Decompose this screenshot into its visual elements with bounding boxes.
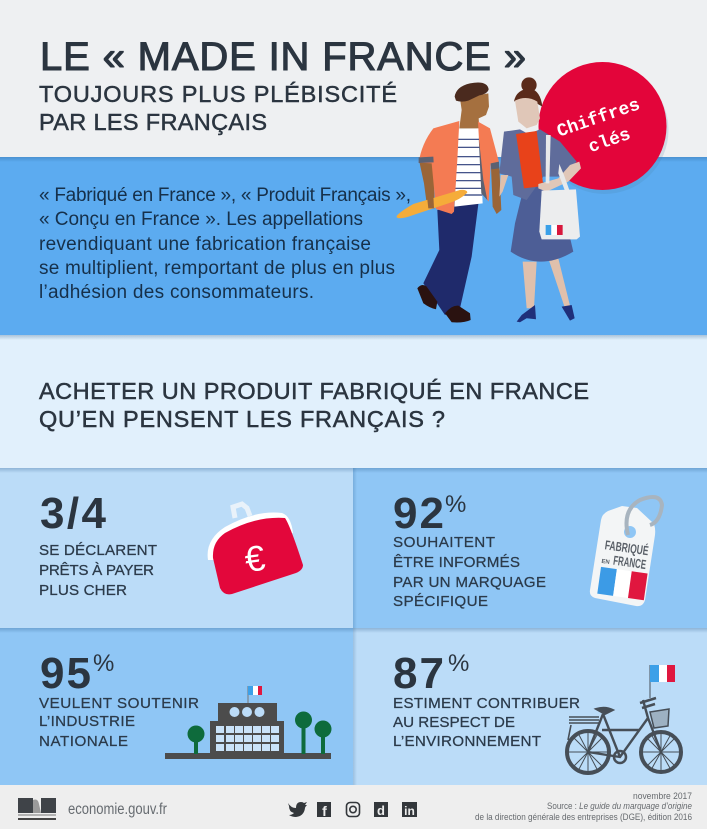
intro text block: revendiquant une fabrication française	[39, 234, 371, 255]
stat: 95%: L’INDUSTRIE	[39, 713, 135, 730]
stat: 87%	[393, 649, 580, 750]
intro text block: « Fabriqué en France », « Produit Français »,	[39, 185, 411, 206]
heading: question: ACHETER UN PRODUIT FABRIQUÉ EN FRANCE	[39, 378, 589, 404]
icon: bicycle with flag	[567, 665, 682, 773]
badge: Chiffres clés: Chiffres	[555, 95, 643, 142]
icon: twitter	[288, 802, 307, 817]
stat: 92%: SPÉCIFIQUE	[393, 593, 488, 610]
stat: 92%: ÊTRE INFORMÉS	[393, 554, 520, 571]
panel: question band	[0, 335, 707, 468]
stat: 92%: %	[445, 491, 466, 518]
stat: 92%: SOUHAITENT	[393, 534, 495, 551]
stat: 87%: %	[448, 650, 469, 677]
website url: economie.gouv.fr	[68, 801, 167, 818]
stat: 95%	[39, 649, 199, 750]
heading: question	[39, 378, 589, 432]
panel: stat 3/4 background	[0, 468, 353, 628]
icon: Fabriqué en France tag: EN	[601, 559, 610, 566]
stat: 92%: PAR UN MARQUAGE	[393, 574, 546, 591]
subtitle: TOUJOURS PLUS PLÉBISCITÉ	[39, 81, 397, 107]
logo: République française	[18, 798, 56, 819]
stat: 3/4: SE DÉCLARENT	[39, 542, 157, 559]
source note	[475, 791, 692, 823]
panel: intro blue band	[0, 157, 707, 335]
stat: 92%	[393, 489, 546, 610]
stat: 95%: 95	[40, 649, 91, 698]
stat: 3/4: 3/4	[40, 489, 107, 538]
title: LE « MADE IN FRANCE »	[40, 35, 526, 79]
stat: 87%: AU RESPECT DE	[393, 714, 515, 731]
stat: 87%: L’ENVIRONNEMENT	[393, 733, 541, 750]
panel: stat 95% background	[0, 628, 353, 785]
icon: dailymotion: d	[377, 803, 385, 818]
badge: Chiffres clés	[538, 62, 668, 194]
stat: 3/4: PLUS CHER	[39, 582, 127, 599]
illustration: couple walking	[397, 77, 581, 323]
icon: red purse with euro	[208, 504, 303, 594]
man	[397, 82, 501, 323]
subtitle	[39, 81, 397, 135]
panel: stat 92% background	[353, 468, 707, 628]
icon: red purse with euro: €	[242, 537, 268, 580]
icon: Fabriqué en France tag: FABRIQUÉ	[604, 537, 650, 558]
icon: facebook: f	[322, 803, 327, 819]
badge: Chiffres clés: clés	[586, 125, 633, 158]
stat: 87%: 87	[393, 649, 444, 698]
icon: factory with trees	[165, 686, 332, 759]
panel: stat 87% background	[353, 628, 707, 785]
icon: instagram	[346, 802, 360, 816]
intro text block: se multiplient, remportant de plus en plus	[39, 258, 395, 279]
icon: Fabriqué en France tag: FRANCE	[612, 553, 647, 572]
woman	[499, 77, 581, 322]
heading: question: QU’EN PENSENT LES FRANÇAIS ?	[39, 406, 445, 432]
stat: 95%: VEULENT SOUTENIR	[39, 695, 199, 712]
intro text block	[39, 185, 411, 303]
stat: 3/4	[39, 489, 157, 599]
intro text block: l’adhésion des consommateurs.	[39, 282, 314, 303]
source note: novembre 2017	[633, 791, 692, 802]
panel: header background	[0, 0, 707, 157]
stat: 87%: ESTIMENT CONTRIBUER	[393, 695, 580, 712]
intro text block: « Conçu en France ». Les appellations	[39, 209, 363, 230]
icon: Fabriqué en France tag	[590, 497, 662, 606]
stat: 95%: %	[93, 650, 114, 677]
stat: 92%: 92	[393, 489, 444, 538]
icons: social networks	[288, 802, 417, 819]
subtitle: PAR LES FRANÇAIS	[39, 109, 267, 135]
stat: 95%: NATIONALE	[39, 733, 128, 750]
panel: footer background	[0, 785, 707, 829]
stat: 3/4: PRÊTS À PAYER	[39, 562, 154, 579]
icon: linkedin: in	[404, 804, 415, 818]
